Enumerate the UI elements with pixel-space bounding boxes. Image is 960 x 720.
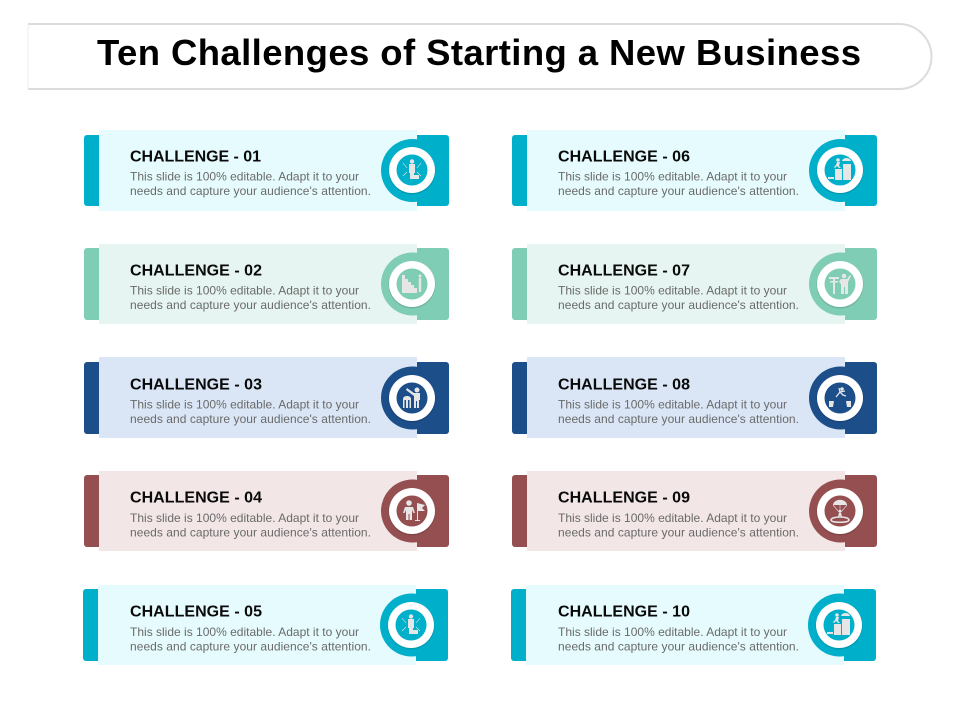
panel: challenge 01 — [84, 130, 449, 211]
body text: needs and capture your audience's attention. — [558, 640, 799, 654]
body text: This slide is 100% editable. Adapt it to your — [130, 284, 359, 298]
icon: person with briefcase — [402, 614, 420, 634]
heading: CHALLENGE - 10 — [558, 604, 690, 620]
body text: needs and capture your audience's attention. — [130, 526, 371, 540]
heading: CHALLENGE - 03 — [130, 376, 262, 394]
body text: needs and capture your audience's attention. — [130, 640, 371, 654]
icon: person jumping between blocks — [829, 387, 851, 407]
body text: This slide is 100% editable. Adapt it to your — [558, 398, 787, 412]
icon: person climbing steps — [827, 613, 850, 635]
panel: challenge 08 — [512, 357, 877, 438]
body text: needs and capture your audience's attention. — [558, 298, 799, 312]
panel: challenge 02 — [84, 244, 449, 324]
heading: CHALLENGE - 06 — [558, 148, 690, 166]
icon: stairs and person — [402, 274, 422, 293]
title: Ten Challenges of Starting a New Business — [97, 32, 861, 73]
body text: This slide is 100% editable. Adapt it to your — [130, 170, 359, 184]
body text: This slide is 100% editable. Adapt it to your — [558, 511, 787, 525]
heading: CHALLENGE - 09 — [558, 490, 690, 506]
body text: This slide is 100% editable. Adapt it to your — [558, 170, 787, 184]
panel: challenge 06 — [512, 130, 877, 211]
heading: CHALLENGE - 07 — [558, 262, 690, 280]
icon: parachute over target — [831, 500, 849, 522]
panel: challenge 03 — [84, 357, 449, 438]
icon: person over group — [403, 388, 420, 408]
title banner — [28, 24, 932, 89]
heading: CHALLENGE - 01 — [130, 148, 261, 166]
body text: needs and capture your audience's attention. — [558, 412, 799, 426]
body text: needs and capture your audience's attention. — [130, 412, 371, 426]
panel: challenge 07 — [512, 244, 877, 324]
panel: challenge 04 — [84, 471, 449, 551]
icon: person with briefcase — [403, 159, 421, 179]
panel: challenge 09 — [512, 471, 877, 551]
body text: This slide is 100% editable. Adapt it to your — [558, 284, 787, 298]
body text: needs and capture your audience's attention. — [558, 184, 799, 198]
panel: challenge 05 — [83, 585, 448, 665]
panel: challenge 10 — [511, 585, 876, 665]
body text: needs and capture your audience's attention. — [558, 526, 799, 540]
icon: person with flag — [403, 500, 425, 521]
body text: This slide is 100% editable. Adapt it to your — [130, 625, 359, 639]
heading: CHALLENGE - 05 — [130, 604, 262, 620]
body text: This slide is 100% editable. Adapt it to your — [130, 511, 359, 525]
body text: This slide is 100% editable. Adapt it to your — [130, 398, 359, 412]
body text: This slide is 100% editable. Adapt it to your — [558, 625, 787, 639]
body text: needs and capture your audience's attention. — [130, 184, 371, 198]
icon: signpost and person — [829, 274, 851, 294]
body text: needs and capture your audience's attention. — [130, 298, 371, 312]
heading: CHALLENGE - 02 — [130, 262, 262, 280]
icon: person climbing steps — [828, 158, 851, 180]
heading: CHALLENGE - 04 — [130, 490, 262, 506]
heading: CHALLENGE - 08 — [558, 376, 690, 394]
